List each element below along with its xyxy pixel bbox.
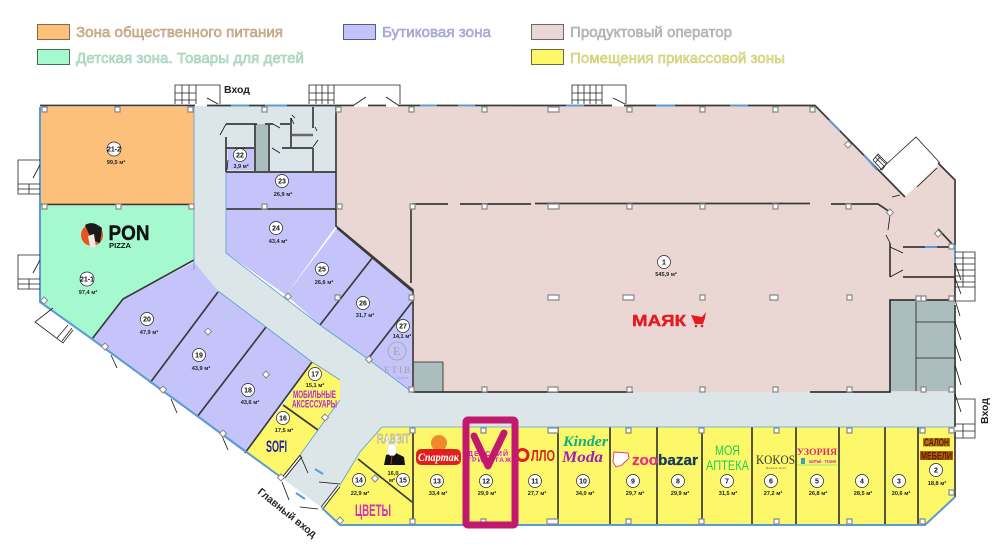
- unit 14: 14: [355, 478, 363, 484]
- technical rooms: [255, 124, 955, 392]
- logo: Ollo: ЛЛО: [531, 448, 555, 465]
- unit 4: 28,5 м²: [854, 490, 872, 497]
- unit 1: 545,9 м²: [655, 271, 677, 278]
- unit 12: 29,9 м²: [478, 490, 496, 497]
- unit 23: 26,9 м²: [274, 191, 292, 198]
- room 26: [320, 257, 412, 359]
- doors: [33, 97, 961, 509]
- room 18: [197, 327, 312, 453]
- grocery hall room 1: [337, 106, 955, 392]
- unit 6: 6: [769, 478, 773, 486]
- unit 13: 13: [433, 478, 441, 486]
- unit 9: 9: [631, 478, 635, 486]
- unit 7: 7: [725, 478, 729, 486]
- logo: Mayak grocery: МАЯК: [632, 313, 686, 330]
- unit 27: 14,1 м²: [393, 333, 411, 340]
- logo: unit 12 tenant: ТРИКОТАЖ: [467, 457, 511, 464]
- walls: [40, 106, 955, 525]
- boutique rooms: [92, 148, 412, 453]
- logo: mobile accessories: [292, 389, 337, 410]
- unit 11: [528, 474, 546, 497]
- unit 12: [478, 474, 496, 497]
- legend: [38, 24, 785, 67]
- unit 20: 47,9 м²: [140, 329, 158, 336]
- unit 18: [241, 384, 259, 406]
- logo: Ollo: [517, 448, 555, 465]
- entrance labels: [224, 84, 991, 541]
- unit 24: 24: [272, 226, 280, 232]
- unit 8: 29,9 м²: [671, 490, 689, 497]
- unit 8: [671, 474, 689, 497]
- logo: Furniture salon: САЛОН: [924, 437, 949, 449]
- room 22: [228, 148, 254, 170]
- logo: Spartak: [416, 435, 461, 465]
- unit 27: 27: [399, 324, 407, 330]
- logo: Kinder Moda: Kinder: [562, 434, 608, 450]
- unit 24: 43,4 м²: [269, 238, 287, 245]
- unit 11: 27,7 м²: [528, 490, 546, 497]
- room 24: [226, 210, 336, 295]
- unit 15: 16,0: [388, 471, 398, 477]
- unit 13: [429, 474, 447, 497]
- stairs left 2: [18, 255, 40, 289]
- logo: zoobazar: [613, 452, 698, 469]
- logo: My pharmacy: МОЯ: [715, 442, 740, 458]
- room strip 2-15: [322, 427, 955, 525]
- corridor edge lines: [194, 106, 955, 485]
- unit 19: 19: [195, 352, 203, 360]
- unit 3: 3: [897, 478, 901, 486]
- unit 25: 26,6 м²: [315, 279, 333, 286]
- logo: Spartak: Спартак: [418, 452, 460, 464]
- stairs top 1: [175, 85, 220, 104]
- unit 10: [576, 474, 594, 497]
- unit 1: [655, 256, 677, 278]
- stairs south-east: [955, 399, 975, 438]
- checkout rooms: [245, 362, 955, 525]
- unit 21-1: 21-1: [80, 276, 94, 284]
- logo: ETIB: E: [393, 344, 400, 358]
- logo: Kokos: modern store: [766, 466, 787, 470]
- logo: My pharmacy: [706, 442, 750, 473]
- logo: ETIB: Studios: [397, 376, 409, 380]
- unit 2: 18,8 м²: [928, 480, 946, 487]
- unit 4: [854, 474, 872, 497]
- unit 23: 23: [278, 178, 286, 186]
- logo: Flowers: ЦВЕТЫ: [355, 501, 391, 520]
- unit 7: [719, 474, 737, 497]
- tech room: [414, 362, 443, 392]
- room 25: [286, 228, 373, 325]
- unit 23: [274, 174, 292, 198]
- stairs top 3: [572, 85, 626, 104]
- highlight: unit 12 frame and check mark: [466, 420, 515, 525]
- unit 22: 22: [236, 152, 244, 160]
- stairs left 1: [18, 160, 40, 194]
- unit 4: 4: [860, 478, 864, 486]
- unit 14: [351, 474, 369, 497]
- unit 21-2: 99,5 м²: [107, 159, 125, 166]
- unit 3: [892, 474, 910, 497]
- stairs east: [955, 252, 975, 301]
- unit 5: 26,8 м²: [809, 490, 827, 497]
- logo: Furniture salon: МЕБЕЛИ: [921, 450, 952, 462]
- glazing: [40, 106, 955, 525]
- outer walls: [40, 106, 955, 497]
- unit 20: [140, 312, 158, 336]
- highlight frame: [466, 420, 515, 525]
- room numbers and areas: [79, 142, 946, 497]
- corridor: [194, 106, 955, 508]
- logo: Kinder Moda: [561, 434, 608, 466]
- tenant logos: [81, 222, 953, 520]
- tech room service: [255, 124, 268, 171]
- logo: unit 12 tenant: ДЕТСКИЙ: [468, 449, 508, 458]
- unit 26: 26: [359, 300, 367, 308]
- legend item: kids zone: Детская зона. Товары для детей: [76, 50, 304, 67]
- unit 9: 29,7 м²: [626, 490, 644, 497]
- logo: PON PIZZA: PON: [108, 222, 150, 245]
- unit 21-2: [107, 142, 125, 166]
- room 17: [283, 362, 340, 430]
- logo: mobile accessories: АКСЕССУАРЫ: [292, 398, 337, 410]
- room 20: [92, 262, 218, 383]
- unit 10: 34,0 м²: [576, 490, 594, 497]
- unit 21-1: 97,4 м²: [79, 289, 97, 296]
- unit 14: 22,9 м²: [351, 490, 369, 497]
- check mark V: [474, 433, 504, 466]
- diamond pillars: [40, 141, 942, 524]
- unit 19: 43,9 м²: [192, 365, 210, 372]
- unit 13: 33,4 м²: [429, 490, 447, 497]
- legend item: food court: Зона общественного питания: [76, 24, 283, 41]
- logo: PON PIZZA: PIZZA: [109, 241, 132, 250]
- unit 17: 17: [311, 372, 319, 378]
- unit 16: [275, 412, 293, 434]
- label: entrance top: Вход: [224, 84, 250, 96]
- unit 6: [764, 474, 782, 497]
- unit 22: 3,9 м²: [233, 163, 249, 170]
- stairs and entrance boxes: [18, 85, 975, 438]
- stairs lower left: [35, 308, 73, 343]
- room 16: [245, 405, 318, 478]
- unit 15: м²: [389, 477, 395, 484]
- unit 9: [626, 474, 644, 497]
- label: main entrance: Главный вход: [255, 486, 319, 541]
- unit 11: 11: [531, 478, 539, 486]
- unit 19: [192, 348, 210, 372]
- unit 25: 25: [318, 266, 326, 274]
- unit 21-1: [79, 272, 97, 296]
- stairs top 2: [309, 85, 400, 104]
- room 21-1 kids zone: [41, 206, 194, 339]
- annex room north-east: [873, 137, 940, 170]
- pillars: [42, 107, 954, 524]
- unit 6: 27,2 м²: [764, 490, 782, 497]
- unit 15: 15: [399, 478, 407, 484]
- room 23: [226, 172, 336, 208]
- logo: PON PIZZA: [81, 222, 150, 250]
- legend item: checkout zone: Помещения прикассовой зоны: [570, 50, 785, 67]
- unit 10: 10: [579, 478, 587, 486]
- logo: Mayak grocery: [632, 312, 706, 330]
- room 21-2 food court: [41, 107, 194, 204]
- floor plan: [18, 85, 975, 525]
- unit 5: [809, 474, 827, 497]
- logo: mobile accessories: МОБИЛЬНЫЕ: [293, 389, 336, 401]
- room 19: [150, 291, 266, 417]
- room 27: [368, 302, 412, 392]
- unit 3: 20,6 м²: [892, 490, 910, 497]
- unit 12: 12: [482, 478, 490, 486]
- unit 16: 16: [279, 416, 287, 422]
- logo: ETIB: [384, 342, 410, 380]
- legend item: grocery operator: Продуктовый оператор: [570, 24, 732, 41]
- unit 18: 43,6 м²: [241, 399, 259, 406]
- unit 21-2: 21-2: [107, 146, 121, 154]
- logo: zoobazar: bazar: [658, 452, 698, 469]
- logo: zoobazar: zoo: [632, 452, 658, 469]
- unit 18: 18: [244, 388, 252, 394]
- logo: Uzoria: УЗОРИЯ: [797, 448, 837, 458]
- logo: ETIB: ETIB: [384, 365, 410, 375]
- unit 15: [388, 471, 410, 486]
- logo: Rabbit: RABBIT: [377, 431, 410, 446]
- tech room right: [890, 300, 955, 391]
- logo: Uzoria: [797, 448, 837, 465]
- unit 22: [233, 148, 249, 170]
- logo: Rabbit: [377, 431, 410, 465]
- unit 8: 8: [676, 478, 680, 486]
- unit 2: 2: [934, 468, 938, 474]
- logo: Furniture salon: [920, 437, 953, 462]
- unit 27: [393, 320, 411, 340]
- logo: Uzoria: ШИТЬЁ · ТКАНИ: [809, 458, 836, 464]
- unit 16: 17,5 м²: [275, 427, 293, 434]
- legend item: boutique zone: Бутиковая зона: [382, 24, 492, 41]
- label: entrance east: Вход: [979, 398, 991, 424]
- logo: Kokos: KOKOS: [756, 452, 795, 467]
- logo: My pharmacy: АПТЕКА: [706, 457, 750, 473]
- unit 2: [928, 464, 946, 487]
- logo: Kinder Moda: Moda: [561, 449, 603, 466]
- unit 5: 5: [815, 478, 819, 486]
- unit 26: [356, 296, 374, 319]
- unit 20: 20: [143, 316, 151, 324]
- unit 24: [269, 222, 287, 245]
- unit 1: 1: [662, 260, 666, 266]
- unit 26: 31,7 м²: [356, 312, 374, 319]
- unit 25: [315, 262, 333, 286]
- unit 7: 31,5 м²: [719, 490, 737, 497]
- unit 17: [306, 368, 324, 389]
- logo: unit 12 tenant: [467, 449, 511, 464]
- logo: SOFI: SOFI: [266, 437, 287, 456]
- unit 17: 15,1 м²: [306, 382, 324, 389]
